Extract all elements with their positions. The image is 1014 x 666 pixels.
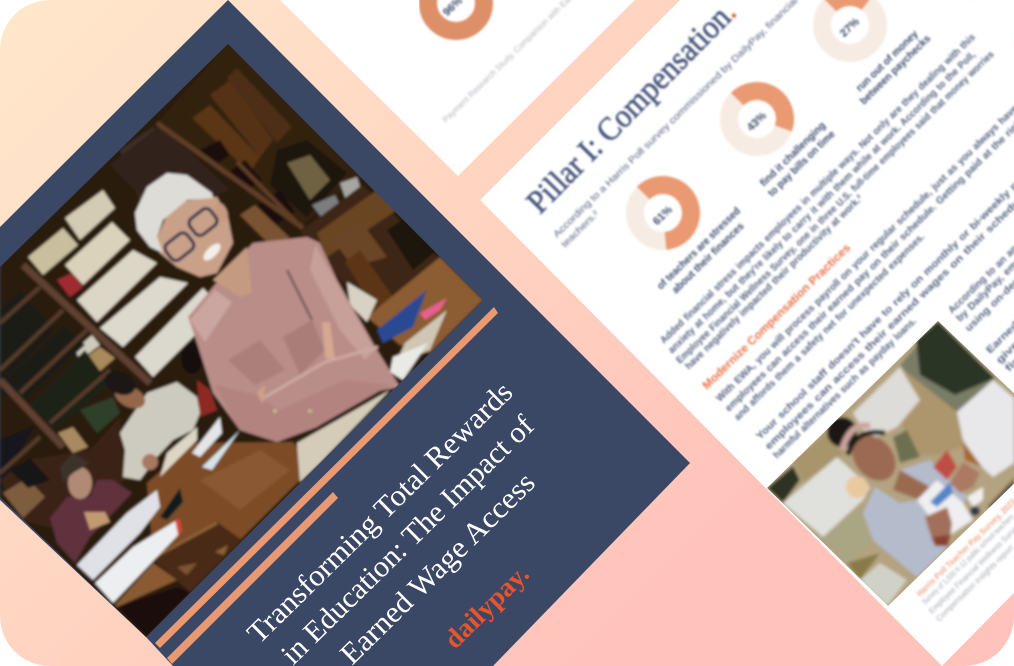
table [147,442,303,555]
chart: 61% donut [635,185,691,241]
paragraph: financial stress: anxiety at home, but they're likely to carry it with them while at work. According to the Poll, [666,50,978,356]
paragraph: with EWA: and affords them a safety net for unexpected expenses. [732,232,927,423]
shadow under table [119,588,188,634]
panel: upper report page [280,0,635,176]
chart: 96% donut [428,0,484,31]
panel: report cover [0,0,690,666]
intro text: teachers.² [559,209,601,250]
white books [65,190,115,240]
teacher pants [297,390,390,482]
stacks of paper [77,490,160,580]
panel: pillar 1 report page [480,0,1014,666]
paragraph: school staff: harmful alternatives such as payday loans. [771,316,919,461]
teacher smile [201,241,223,263]
chart: 27% donut [822,0,878,53]
photo caption: Compensation insights report [934,543,1014,623]
chart: 43% donut: 43% [745,110,769,134]
paragraph: financial stress: have negatively impacted their productivity at work.³ [683,193,866,372]
upper shelves [193,69,294,212]
cover title: Earned Wage Access [334,466,542,666]
chair [155,522,242,592]
label: 61%: of teachers are stressed [655,205,743,292]
teacher glasses [163,206,219,263]
chart: 43% donut [729,91,785,147]
label: 61%: about their finances [670,220,747,296]
teacher shirt [188,237,400,442]
cover title: in Education: The Impact of [275,409,540,666]
teacher neck [213,247,252,297]
subheading: modernize compensation practices: Modernize Compensation Practices [701,242,853,392]
books on right table [347,282,377,322]
teacher face [157,197,233,277]
logo: dailypay: dailypay. [438,559,535,654]
chart: 61% donut: 61% [651,204,675,228]
label: 27%: run out of money [854,28,921,94]
label: 27%: between paychecks [858,33,933,107]
left floor and box [0,417,125,530]
shelf boards [23,265,150,383]
paragraph: financial stress: Added financial stress impacts employees in multiple ways. Not only are they dealing with this [658,32,978,346]
upper page content [419,0,572,123]
intro text: According to a Harris Poll survey commissioned by DailyPay, financial stress [551,0,823,240]
label: 43%: find it challenging [758,120,828,189]
seated woman in plaid [50,480,132,563]
side column text [948,244,1014,372]
label: 43%: to pay bills on time [766,128,838,199]
photo: smiling teacher in library [0,40,490,640]
photo: woman with phone and card [767,321,1014,606]
accent bar: long [155,307,498,648]
papers near man [160,427,197,477]
dark books lower left [0,290,55,385]
right shelves and table [300,186,438,294]
teacher hair [135,173,213,253]
chart: 27% donut: 27% [838,16,862,40]
accent bar: short [167,492,338,664]
page text and charts [520,0,1014,623]
cover title: Transforming Total Rewards [241,376,519,650]
seated man [120,382,200,480]
